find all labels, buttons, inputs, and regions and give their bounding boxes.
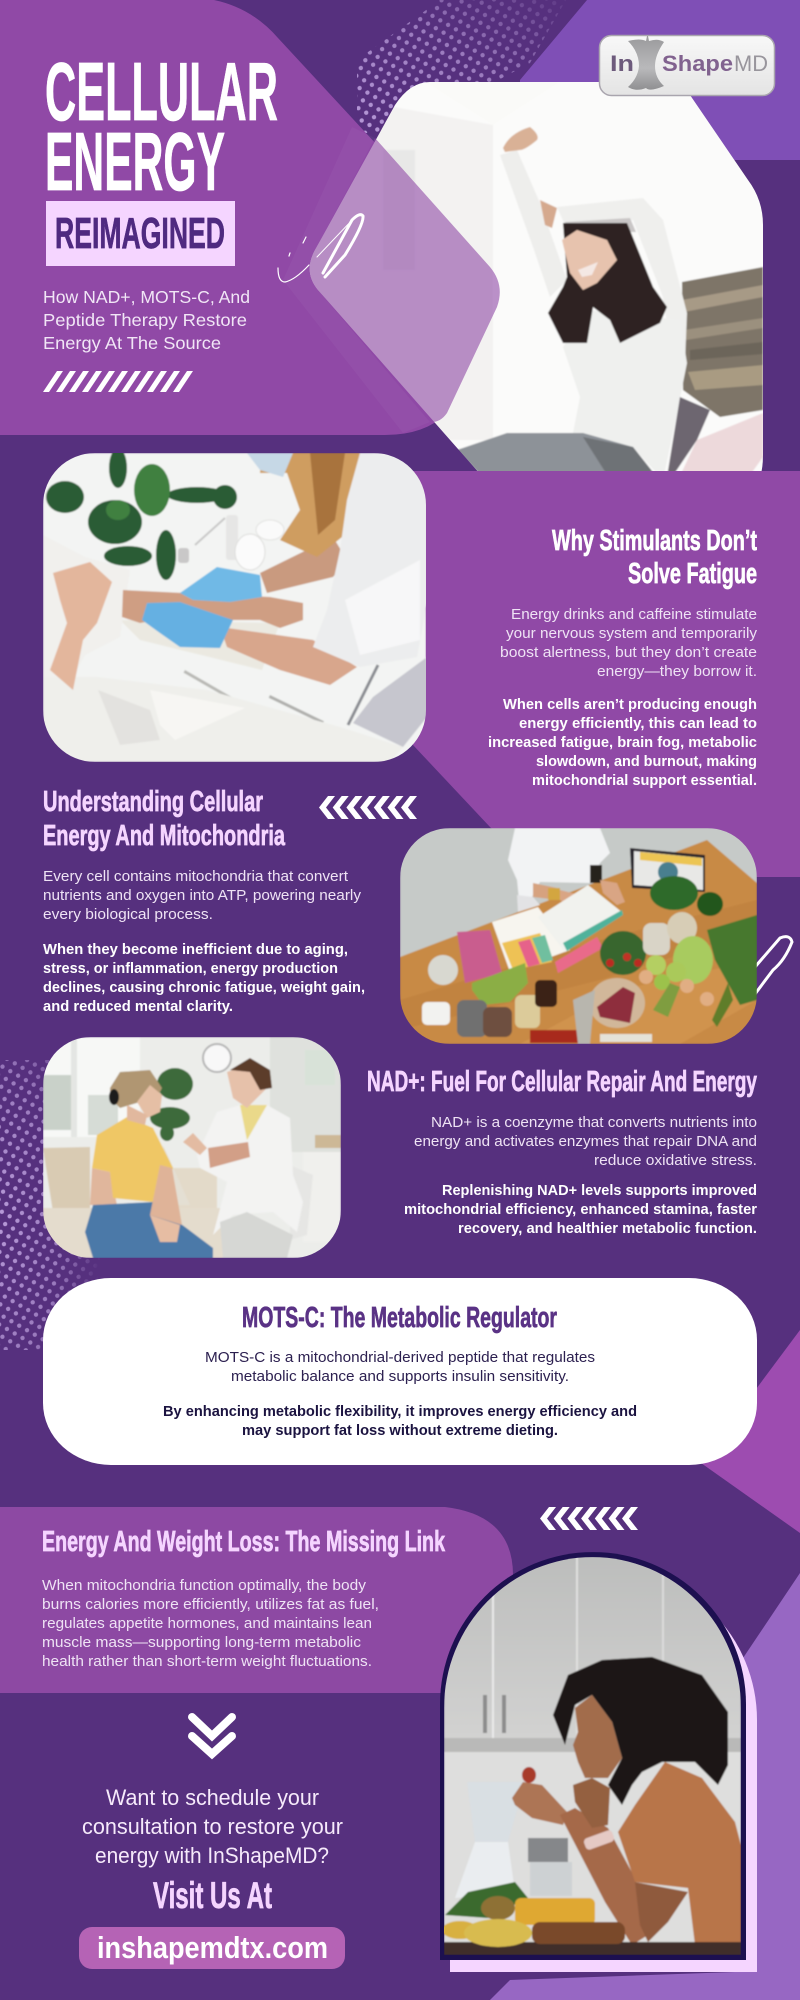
chevrons lower [540,1507,638,1530]
call to action text [82,1785,343,1868]
subtitle: Peptide Therapy Restore [43,310,247,330]
right accent triangle [701,1330,800,1533]
pink arch backing [450,1567,757,1972]
blender [467,1782,525,1842]
top right accent shape [520,0,800,160]
raised arm [500,150,567,297]
sofa [43,1147,90,1225]
greens [707,915,757,1005]
text: mitochondria bold: stress, or inflammation, energy production [43,960,338,977]
text: weight loss body: When mitochondria function optimally, the body [42,1577,367,1594]
photo: woman eating [442,1555,741,1955]
purple panel: stimulants [413,471,800,877]
text: NAD+ body: reduce oxidative stress. [594,1152,757,1169]
gloves [180,567,262,602]
mask [247,453,293,477]
logo wordmark: MD [734,51,768,76]
text: mitochondria bold: When they become inefficient due to aging, [43,941,348,958]
arch outline [440,1552,746,1960]
icon: double chevron down [192,1717,232,1754]
title: CELLULAR [45,45,278,138]
section heading: mitochondria: Understanding Cellular [43,786,263,818]
text: NAD+ bold: recovery, and healthier metabolic function. [458,1220,757,1237]
clock [203,1044,231,1072]
tape and tomatoes [530,1030,580,1043]
coat [313,453,427,667]
subtitle [43,287,250,353]
tablet [208,1142,250,1168]
section heading: mitochondria: Energy And Mitochondria [43,820,286,852]
text: mitochondria body: nutrients and oxygen into ATP, powering nearly [43,887,362,904]
meat [589,978,645,1028]
patient face [137,1085,162,1118]
text: stimulants body: your nervous system and temporarily [506,625,758,642]
stripes [43,371,193,392]
jars and bottles [422,1002,450,1025]
text: mitochondria body: Every cell contains mitochondria that convert [43,868,349,885]
halftone dots top [350,0,570,135]
doctor coat [197,1105,303,1235]
text: weight loss body: muscle mass—supporting long-term metabolic [42,1634,362,1651]
doctor face [227,1062,270,1108]
text: weight loss body: burns calories more efficiently, utilizes fat as fuel, [42,1596,379,1613]
bananas [472,963,528,1005]
plant [46,448,237,580]
patient arm [90,1168,117,1205]
towel and robe [43,535,130,700]
photo: IV therapy [43,448,427,762]
photo: diet planning table [400,828,757,1044]
text: NAD+ body [414,1114,757,1169]
bottle [653,983,680,1017]
MOTS-C bold: may support fat loss without extreme dieting. [242,1422,558,1439]
food [445,1882,528,1918]
spinach [650,876,698,910]
text: NAD+ bold: mitochondrial efficiency, enhanced stamina, faster [404,1201,757,1218]
hero faint inner shape [283,127,430,433]
plant [157,1068,193,1100]
hair [260,453,360,557]
grapes [673,936,713,984]
logo wordmark [610,51,768,76]
glass [428,955,458,985]
pillows [667,397,710,480]
chin hand [573,1778,610,1828]
jeans [85,1202,213,1258]
hands [533,883,558,900]
scribble loop [278,215,363,282]
hair [110,1070,162,1108]
text: mitochondria body: every biological process. [43,906,213,923]
MOTS-C heading: MOTS-C: The Metabolic Regulator [242,1302,557,1334]
chair [290,1165,313,1240]
logo wordmark: Shape [662,51,733,76]
call to action text: Want to schedule your [106,1785,319,1810]
upper arm [635,1882,688,1942]
avocado [712,983,733,1027]
headboard [682,267,763,417]
panel: MOTS-C [43,1278,757,1465]
MOTS-C bold [163,1403,637,1439]
text: mitochondria bold [43,941,365,1015]
photo: consultation [43,1037,341,1258]
meal plan sheets [492,907,570,972]
hair [553,1657,728,1805]
shirt [92,1117,173,1202]
text: stimulants bold: When cells aren’t producing enough [503,696,757,713]
logo wordmark: In [610,51,634,76]
reimagined badge: REIMAGINED [55,209,225,258]
salad [600,931,646,975]
hair [548,223,667,343]
translucent hero overlay [310,138,500,422]
section heading: stimulants [552,525,757,590]
doctor [508,828,610,898]
pants [353,657,427,747]
forearm [560,1808,648,1945]
call to action text: consultation to restore your [82,1814,343,1839]
oats and crackers [643,923,670,955]
torso [563,310,687,480]
reimagined badge [46,201,235,266]
text: weight loss body: regulates appetite hormones, and maintains lean [42,1615,372,1632]
text: mitochondria bold: declines, causing chronic fatigue, weight gain, [43,979,365,996]
text: stimulants bold [488,696,757,789]
panel: weight loss [0,1507,513,1693]
text: weight loss body: health rather than short-term weight fluctuations. [42,1653,372,1670]
text: stimulants body: boost alertness, but they don’t create [500,644,757,661]
hero panel shape [0,0,500,435]
chevrons [319,796,417,819]
kettle [528,1838,568,1862]
text: stimulants bold: mitochondrial support essential. [532,772,757,789]
text: NAD+ bold [404,1182,757,1237]
MOTS-C body: metabolic balance and supports insulin sensitivity. [231,1368,569,1385]
face [573,1695,622,1778]
counter [444,1942,741,1955]
text: mitochondria bold: and reduced mental clarity. [43,998,233,1015]
bottom right lavender shape [490,1573,800,2000]
MOTS-C body [205,1349,595,1385]
blanket [458,432,632,471]
table [400,840,757,1044]
MOTS-C body: MOTS-C is a mitochondrial-derived peptide that regulates [205,1349,595,1366]
face [562,230,617,290]
pink folder [457,930,502,983]
text: stimulants bold: energy efficiently, this can lead to [519,715,757,732]
text: stimulants bold: increased fatigue, brain fog, metabolic [488,734,757,751]
patient forearm [122,590,303,628]
title [45,45,278,208]
clipboard [630,848,705,892]
shirt [618,1762,741,1945]
logo icon: apple core [628,36,664,90]
nurse lower arm [220,627,357,685]
text: mitochondria body [43,868,362,923]
website button: inshapemdtx.com [97,1930,328,1965]
patient hand [50,562,112,690]
halftone dots left [0,1060,120,1350]
second scribble [755,937,792,994]
title: ENERGY [45,115,225,208]
text: NAD+ body: NAD+ is a coenzyme that converts nutrients into [431,1114,757,1131]
text: stimulants bold: slowdown, and burnout, making [536,753,757,770]
weight loss heading: Energy And Weight Loss: The Missing Link [42,1526,446,1558]
window [43,1037,140,1137]
logo [600,36,774,96]
other arm [557,198,687,363]
text: stimulants body [500,606,758,680]
MOTS-C bold: By enhancing metabolic flexibility, it improves energy efficiency and [163,1403,637,1420]
text: NAD+ body: energy and activates enzymes that repair DNA and [414,1133,757,1150]
apples [646,955,666,975]
text: weight loss body [42,1577,379,1670]
nurse upper arm [260,541,341,594]
watch [583,1829,615,1851]
visit us heading: Visit Us At [153,1875,272,1916]
text: stimulants body: Energy drinks and caffeine stimulate [511,606,757,623]
subtitle: How NAD+, MOTS-C, And [43,287,250,307]
hero photo: woman stretching [310,82,763,471]
armrest [120,620,280,670]
pants [220,1212,293,1258]
strawberry hand [512,1782,567,1825]
shelf [270,1037,341,1152]
text: NAD+ bold: Replenishing NAD+ levels supports improved [442,1182,757,1199]
section heading: mitochondria [43,786,286,852]
text: stimulants body: energy—they borrow it. [597,663,757,680]
table supplies [226,515,238,560]
subtitle: Energy At The Source [43,333,221,353]
call to action text: energy with InShapeMD? [95,1843,329,1868]
